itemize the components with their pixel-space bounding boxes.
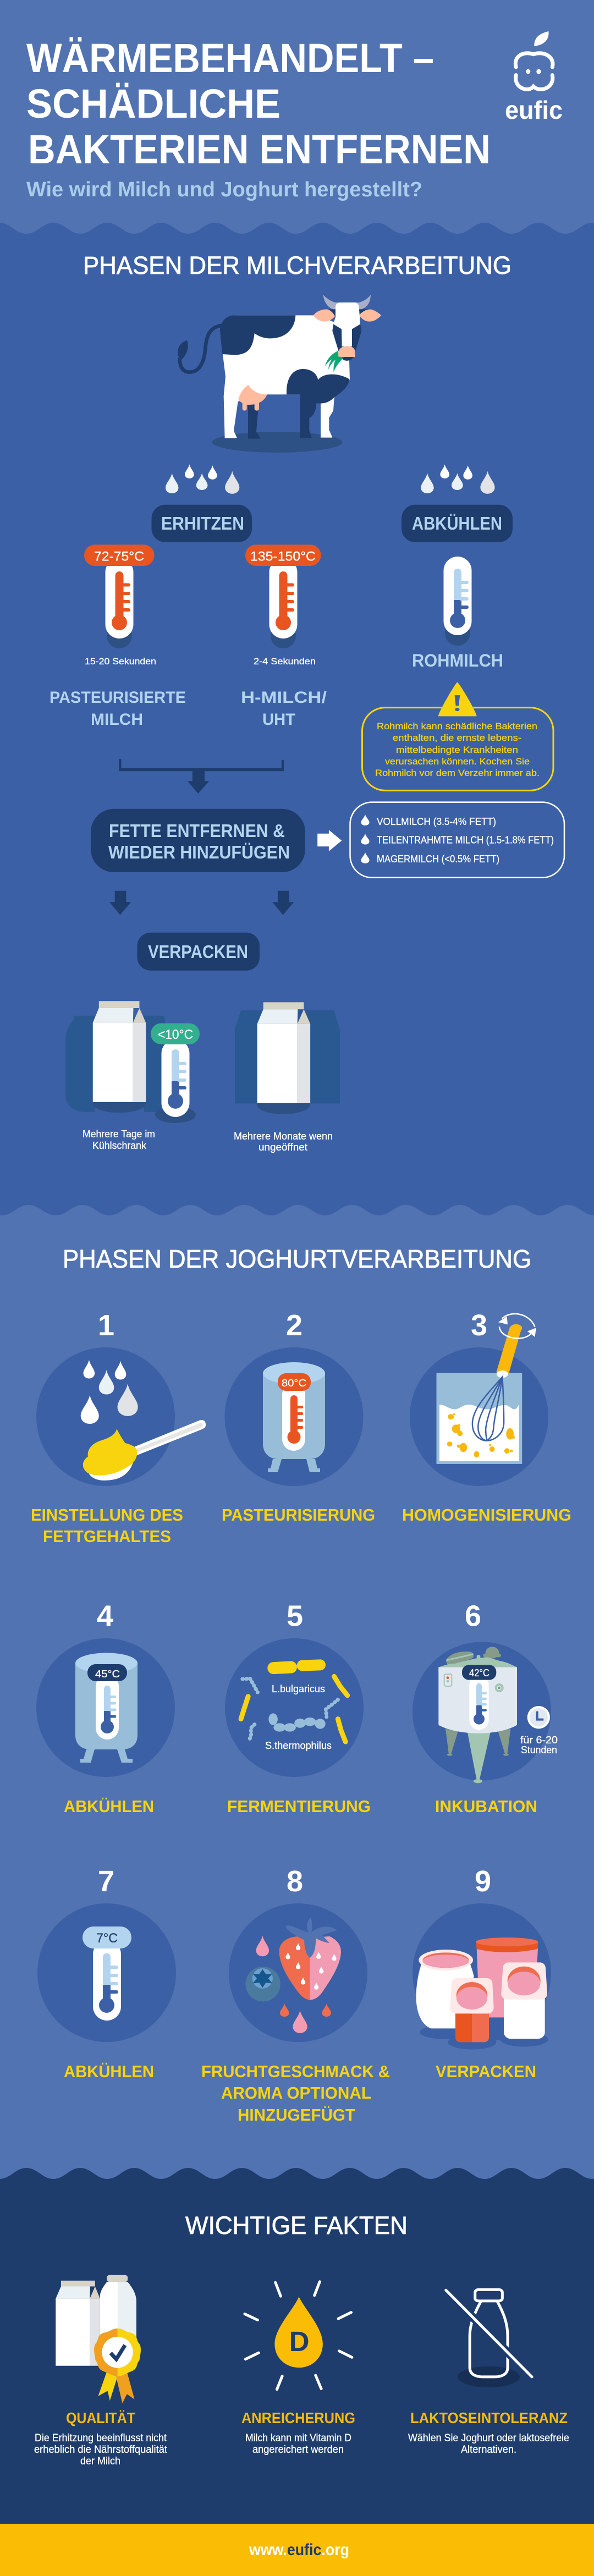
icon: chilled carton with bottles [65, 1001, 165, 1113]
step 5: fermentation [225, 1599, 371, 1816]
fact: fortification [241, 2282, 355, 2456]
fact: fortification: Milch kann mit Vitamin D [245, 2432, 351, 2444]
step 7: cooling [37, 1865, 176, 2081]
label: pasteurised milk: MILCH [91, 711, 143, 729]
icon: milk carton, bottle and rosette [56, 2275, 141, 2403]
step 1: fat adjustment [31, 1309, 206, 1546]
icon: cooling tank [75, 1653, 138, 1763]
step 9: packaging: 9 [475, 1865, 491, 1898]
step pill: ERHITZEN: ERHITZEN [161, 513, 244, 533]
icon: warning triangle [438, 682, 477, 716]
logo: eufic apple [505, 31, 563, 124]
arrow: down left [109, 891, 131, 915]
background: header band [0, 0, 594, 242]
step 8: fruit flavour: FRUCHTGESCHMACK & [201, 2062, 390, 2081]
fact: quality: erheblich die Nährstoffqualität [34, 2444, 168, 2456]
caption: long-life shelf life: ungeöffnet [258, 1142, 307, 1153]
panel: milk types [350, 802, 564, 878]
icon: long-life carton [235, 1002, 340, 1114]
arrow: to milk types [317, 830, 342, 851]
footer bar [0, 2524, 594, 2576]
step 8: fruit flavour [201, 1865, 390, 2124]
step 9: packaging [413, 1865, 551, 2081]
background: milk section with wave [0, 223, 594, 1226]
icon: clock [527, 1706, 550, 1729]
step 6: incubation: 6 [465, 1599, 481, 1632]
step 5: fermentation: S.thermophilus [265, 1740, 332, 1751]
step 8: fruit flavour: HINZUGEFÜGT [238, 2105, 355, 2124]
step pill: ERHITZEN [152, 505, 252, 542]
caption: chilled shelf life: Mehrere Tage im [82, 1129, 155, 1140]
label: UHT milk [241, 689, 327, 729]
thermometer: 7°C [82, 1927, 131, 2021]
label: UHT milk: UHT [262, 711, 295, 729]
step 1: fat adjustment: EINSTELLUNG DES [31, 1505, 183, 1524]
callout: raw milk warning: verursachen können. Kochen Sie [385, 757, 530, 767]
logo: eufic apple: eufic [505, 96, 563, 124]
step 3: homogenisation [402, 1309, 571, 1524]
background: facts section with wave [0, 2168, 594, 2530]
thermometer: 135-150°C [245, 544, 321, 648]
step pill: remove and add fats [91, 809, 305, 872]
icon: vitamin D drop with rays: D [289, 2326, 309, 2357]
icon: whisk in glass [436, 1324, 522, 1464]
fact: quality [34, 2275, 168, 2467]
icon: drops and spoon [81, 1359, 206, 1480]
arrow: down right [272, 891, 294, 915]
step 3: homogenisation: HOMOGENISIERUNG [402, 1505, 571, 1524]
fact: lactose intolerance: Alternativen. [461, 2444, 516, 2456]
step 9: packaging: VERPACKEN [436, 2062, 536, 2081]
arrow: merge bracket [119, 759, 284, 794]
heading: yoghurt phases: PHASEN DER JOGHURTVERARBEITUNG [63, 1245, 531, 1273]
title: SCHÄDLICHE [26, 81, 280, 126]
icon: vitamin D drop with rays [245, 2282, 352, 2390]
duration: 2-4 Sekunden: 2-4 Sekunden [254, 656, 316, 667]
step pill: ABKÜHLEN: ABKÜHLEN [412, 513, 502, 533]
step 6: incubation [413, 1599, 558, 1816]
step 6: incubation: INKUBATION [435, 1797, 537, 1816]
title [26, 35, 491, 172]
step pill: VERPACKEN: VERPACKEN [148, 942, 248, 962]
caption: chilled shelf life [82, 1129, 155, 1151]
step 4: cooling [36, 1599, 175, 1816]
icon: milk drops cooling [421, 464, 495, 494]
fact: fortification: ANREICHERUNG [241, 2409, 355, 2426]
fact: fortification: angereichert werden [252, 2444, 344, 2456]
icon: bacteria [241, 1665, 348, 1742]
step 6: incubation: 42°C [469, 1667, 490, 1678]
thermometer: below 10°C: <10°C [158, 1027, 193, 1042]
label: pasteurised milk [50, 689, 186, 729]
panel: milk types: TEILENTRAHMTE MILCH (1.5-1.8% FETT) [377, 835, 554, 846]
duration: 15-20 Sekunden: 15-20 Sekunden [85, 656, 156, 667]
thermometer: 7°C: 7°C [96, 1931, 118, 1946]
fact: quality: QUALITÄT [66, 2409, 135, 2426]
thermometer: 72-75°C: 72-75°C [94, 549, 144, 564]
icon: cooling tank: 45°C [95, 1669, 120, 1680]
icon: incubation tank [438, 1647, 517, 1783]
step 5: fermentation: FERMENTIERUNG [227, 1797, 371, 1816]
step 2: pasteurisation [222, 1309, 375, 1524]
title: BAKTERIEN ENTFERNEN [28, 126, 491, 172]
step 2: pasteurisation: PASTEURISIERUNG [222, 1505, 375, 1524]
step 1: fat adjustment: FETTGEHALTES [43, 1527, 171, 1546]
step pill: remove and add fats: FETTE ENTFERNEN & [109, 821, 285, 841]
step pill: ABKÜHLEN [402, 505, 513, 542]
icon: rotation arrows [498, 1314, 536, 1339]
step 4: cooling: ABKÜHLEN [64, 1797, 154, 1816]
heading: milk phases: PHASEN DER MILCHVERARBEITUNG [83, 251, 512, 279]
callout: raw milk warning [362, 682, 553, 790]
step 7: cooling: ABKÜHLEN [64, 2062, 154, 2081]
step 1: fat adjustment: 1 [98, 1309, 114, 1342]
heading: key facts: WICHTIGE FAKTEN [185, 2211, 408, 2239]
step 6: incubation: Stunden [521, 1744, 557, 1755]
thermometer: 72-75°C [84, 544, 154, 648]
footer url: www.eufic.org [249, 2541, 349, 2559]
callout: raw milk warning: mittelbedingte Krankheiten [396, 745, 518, 755]
fact: lactose intolerance [408, 2289, 569, 2456]
caption: long-life shelf life: Mehrere Monate wenn [234, 1131, 333, 1142]
step 5: fermentation: L.bulgaricus [272, 1683, 325, 1694]
callout: raw milk warning: Rohmilch kann schädliche Bakterien [377, 722, 537, 731]
icon: crossed-out bottle [446, 2289, 532, 2387]
caption: chilled shelf life: Kühlschrank [92, 1140, 147, 1151]
icon: yoghurt pots [416, 1937, 548, 2050]
step 8: fruit flavour: AROMA OPTIONAL [221, 2083, 371, 2102]
title: WÄRMEBEHANDELT – [26, 35, 434, 81]
icon: cow [178, 295, 381, 453]
step 8: fruit flavour: 8 [287, 1865, 303, 1898]
step pill: VERPACKEN [138, 933, 260, 971]
label: ROHMILCH: ROHMILCH [412, 651, 503, 670]
fact: quality: Die Erhitzung beeinflusst nicht [35, 2432, 167, 2444]
icon: heated tank: 80°C [282, 1378, 306, 1389]
fact: quality: der Milch [80, 2456, 120, 2467]
icon: milk drops heating [166, 464, 239, 494]
label: pasteurised milk: PASTEURISIERTE [50, 689, 186, 707]
background: yoghurt section with wave [0, 1205, 594, 2189]
panel: milk types: MAGERMILCH (<0.5% FETT) [377, 854, 499, 865]
fact: lactose intolerance: Wählen Sie Joghurt oder laktosefreie [408, 2432, 569, 2444]
icon: strawberry and blueberry [245, 1917, 341, 2033]
step pill: remove and add fats: WIEDER HINZUFÜGEN [108, 842, 290, 862]
step 5: fermentation: 5 [287, 1599, 303, 1632]
label: UHT milk: H-MILCH/ [241, 689, 327, 707]
panel: milk types: VOLLMILCH (3.5-4% FETT) [377, 816, 496, 827]
step 4: cooling: 4 [97, 1599, 113, 1632]
step 6: incubation: für 6-20 [520, 1735, 558, 1746]
step 2: pasteurisation: 2 [286, 1309, 302, 1342]
callout: raw milk warning: enthalten, die ernste lebens- [393, 733, 521, 743]
caption: long-life shelf life [234, 1131, 333, 1153]
fact: lactose intolerance: LAKTOSEINTOLERANZ [410, 2409, 568, 2426]
step 7: cooling: 7 [98, 1865, 114, 1898]
callout: raw milk warning: Rohmilch vor dem Verzehr immer ab. [375, 768, 540, 778]
thermometer: raw milk cooling [443, 557, 472, 646]
subtitle: Wie wird Milch und Joghurt hergestellt? [26, 178, 422, 201]
step 3: homogenisation: 3 [471, 1309, 487, 1342]
thermometer: 135-150°C: 135-150°C [250, 549, 316, 564]
icon: heated tank [263, 1362, 325, 1472]
thermometer: below 10°C [151, 1023, 200, 1123]
